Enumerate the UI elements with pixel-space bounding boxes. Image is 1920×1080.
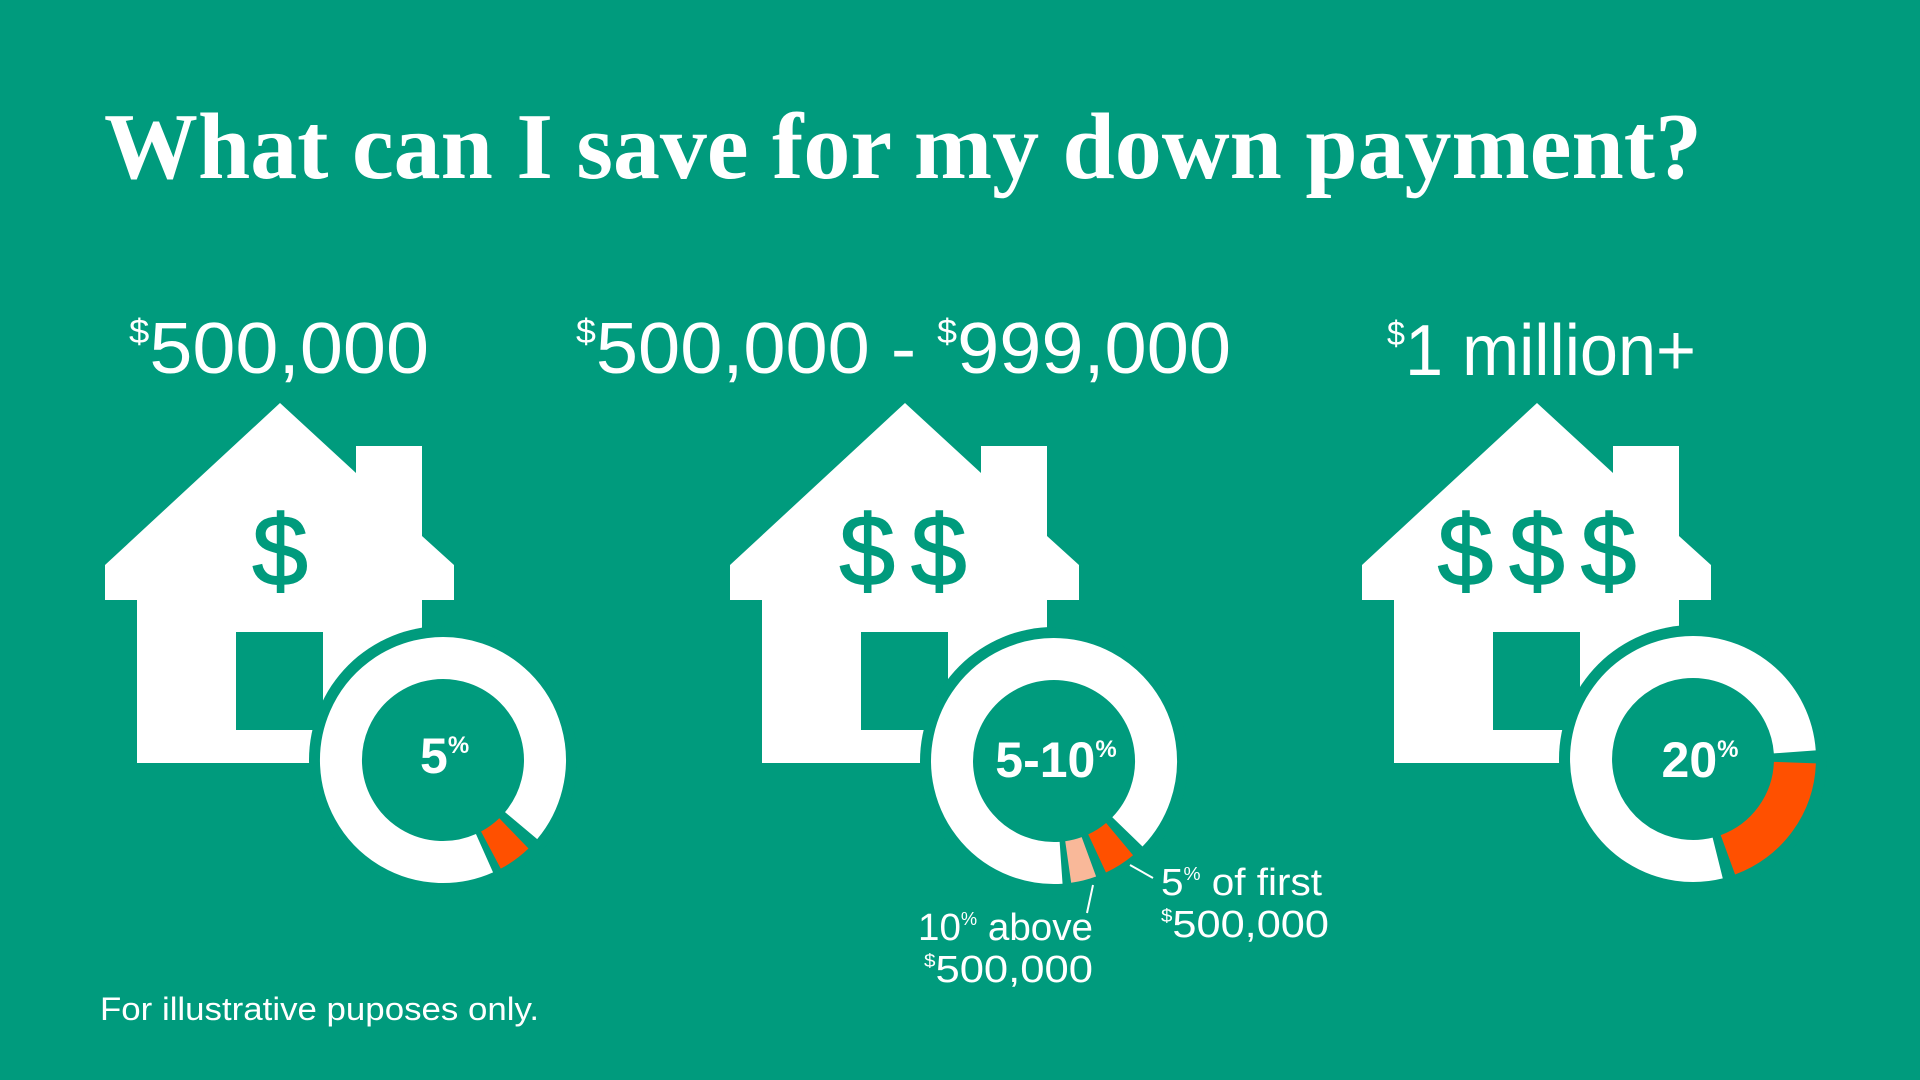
footnote: For illustrative puposes only.: [100, 991, 539, 1027]
heading: $1 million+: $: [1387, 315, 1405, 353]
heading: $500,000: $: [129, 313, 149, 351]
callout: 5% of first $500,000: 500,000: [1172, 904, 1329, 946]
panel: house 3 with 20% donut: [1362, 403, 1827, 893]
panel: house 2 with 5-10% donut: [730, 403, 1329, 991]
heading: $1 million+: 1 million+: [1405, 311, 1696, 391]
title: What can I save for my down payment?: [104, 95, 1702, 199]
callout: 5% of first $500,000: 5: [1161, 862, 1182, 904]
donut chart: 20%: 20: [1662, 732, 1717, 788]
callout: 5% of first $500,000: [1130, 862, 1329, 946]
icon: house 2: [730, 403, 1079, 763]
donut chart: 5-10%: %: [1095, 736, 1117, 763]
callout: 10% above $500,000: [918, 885, 1093, 991]
icon: house 3: $$$: [1438, 495, 1652, 607]
heading: $500,000 - $999,000: 999,000: [957, 309, 1231, 389]
heading: $500,000 - $999,000: $: [576, 313, 596, 351]
callout: 10% above $500,000: %: [961, 909, 977, 929]
callout: 10% above $500,000: 10: [918, 907, 960, 949]
callout: 5% of first $500,000: $: [1161, 906, 1172, 926]
donut chart: 5-10%: [920, 627, 1188, 895]
icon: house 1: $: [252, 495, 308, 607]
callout: 5% of first $500,000: of first: [1201, 862, 1322, 904]
donut chart: 5%: %: [448, 732, 469, 759]
icon: house 2: $$: [839, 495, 983, 607]
icon: house 3: [1362, 403, 1711, 763]
heading: $500,000 - $999,000: $: [937, 313, 957, 351]
donut chart: 20%: [1559, 625, 1827, 893]
icon: house 1: [105, 403, 454, 763]
donut chart: 5%: [309, 626, 577, 894]
heading: $500,000 - $999,000: 500,000 -: [596, 309, 937, 389]
donut chart: 20%: %: [1717, 736, 1738, 763]
panel: house 1 with 5% donut: [105, 403, 577, 894]
callout: 10% above $500,000: 500,000: [935, 949, 1093, 991]
donut chart: 5%: 5: [420, 728, 448, 784]
heading: $500,000: 500,000: [149, 309, 429, 389]
callout: 10% above $500,000: $: [924, 951, 935, 971]
callout: 5% of first $500,000: %: [1184, 864, 1201, 884]
donut chart: 5-10%: 5-10: [995, 732, 1095, 788]
callout: 10% above $500,000: above: [977, 907, 1093, 949]
